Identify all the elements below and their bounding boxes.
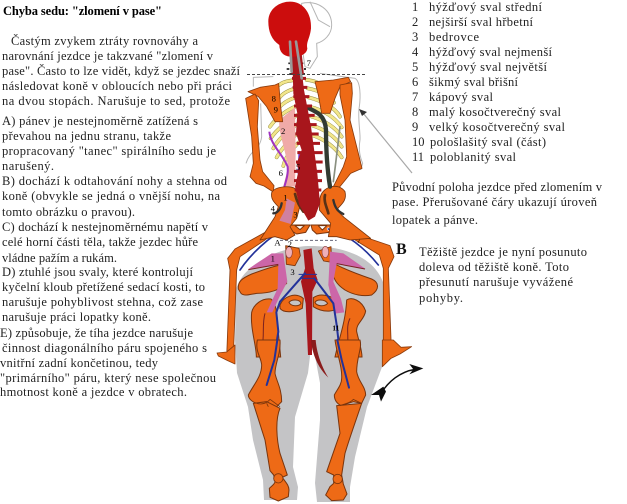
muscle number labels: 3	[290, 267, 295, 277]
text block: point E: hmotnost koně a jezdce v obratech.	[0, 385, 187, 399]
text block: point A: A) pánev je nestejnoměrně zatížená s	[2, 114, 198, 128]
text block: point C: celé horní části těla, takže jezdec hůře	[2, 235, 198, 249]
tail tip	[311, 340, 328, 378]
text block: introduction: následovat koně v obloucích nebo při práci	[2, 79, 233, 93]
legend: muscle list: 11	[412, 150, 424, 164]
femur heads	[251, 299, 366, 357]
text block: point B: tomto obrázku o pravou).	[2, 205, 135, 219]
leg blue muscles	[274, 273, 340, 357]
ghost skull outline	[300, 2, 332, 68]
caption: original position	[392, 180, 603, 227]
legs and hands detail	[217, 340, 423, 501]
muscle number labels	[271, 225, 362, 333]
head	[268, 2, 311, 57]
muscle number labels: 5	[296, 162, 300, 172]
legend: muscle list: malý kosočtverečný sval	[429, 105, 562, 119]
text block: point B	[2, 174, 228, 219]
label B: B	[396, 241, 407, 258]
text block: point C: vládne pažím a rukám.	[2, 251, 117, 265]
scapulae	[248, 77, 351, 122]
shoulder level dashed line	[247, 74, 367, 76]
text block: introduction	[2, 34, 241, 108]
knee and ankle details	[257, 399, 362, 484]
text block: point D: narušuje práci lopatky koně.	[2, 310, 151, 324]
legend: muscle list	[412, 0, 566, 164]
spine end and tail	[301, 248, 318, 355]
title: Chyba sedu: "zlomení v pase"	[3, 4, 162, 18]
muscle number labels: 3	[293, 209, 298, 219]
caption: centre of gravity: Těžiště jezdce je nyní posunuto	[419, 245, 587, 259]
text block: point D: kyčelní kloub přetížené sedací kosti, to	[2, 280, 205, 294]
legend: muscle list: 7	[412, 90, 418, 104]
hip joint ovals	[286, 246, 329, 258]
gluteus muscles	[248, 252, 366, 314]
caption: centre of gravity: pohyby.	[419, 291, 463, 305]
rib cage	[270, 80, 342, 166]
muscle number labels: 8	[272, 94, 276, 104]
muscle number labels: 2	[281, 126, 285, 136]
legend: muscle list: hýžďový sval největší	[429, 60, 548, 74]
legend: muscle list: kápový sval	[429, 90, 494, 104]
text block: point B: B) dochází k odtahování nohy a stehna od	[2, 174, 228, 188]
lower blue muscles	[267, 340, 349, 388]
label 7: 7	[307, 58, 312, 68]
legend: muscle list: 4	[412, 45, 419, 59]
legend: muscle list: 8	[412, 105, 418, 119]
muscle number labels	[271, 94, 300, 219]
spine cervical	[291, 43, 304, 75]
legend: muscle list: 6	[412, 75, 418, 89]
legend: muscle list: 10	[412, 135, 424, 149]
legend: muscle list: 3	[412, 30, 418, 44]
curved movement arrow	[371, 364, 423, 402]
ghost body outline	[246, 73, 363, 170]
muscle number labels: 10	[334, 225, 341, 234]
legend: muscle list: pološlašitý sval (část)	[430, 135, 546, 149]
text block: introduction: narovnání jezdce je takzvané "zlomení v	[2, 49, 214, 63]
muscle number labels: 1	[271, 254, 275, 264]
pink muscle on hip	[279, 198, 295, 224]
legend: muscle list: bedrovce	[429, 30, 479, 44]
muscle number labels: 1	[283, 193, 288, 203]
muscle number labels: 2	[288, 239, 292, 249]
text block: point A: propracovaný "tanec" spirálního sedu je	[2, 144, 216, 158]
text block: introduction: na dvou stopách. Narušuje to sed, protože	[2, 94, 230, 108]
text block: point A: narušený.	[2, 159, 54, 173]
legend: muscle list: hýžďový sval nejmenší	[429, 45, 553, 59]
text block: point C: C) dochází k nestejnoměrnému napětí v	[2, 220, 209, 234]
spine	[292, 70, 323, 221]
legend: muscle list: velký kosočtverečný sval	[429, 120, 566, 134]
head and neck	[268, 2, 312, 78]
muscle number labels: A	[274, 238, 281, 248]
muscle number labels: 4	[271, 203, 276, 213]
text block: point E: vnitřní zadní končetinou, tedy	[0, 356, 159, 370]
legend: muscle list: 5	[412, 60, 418, 74]
legend: muscle list: poloblanitý sval	[430, 150, 517, 164]
legend: muscle list: šikmý sval břišní	[429, 75, 519, 89]
muscle number labels: 7	[357, 235, 362, 245]
legend: muscle list: 2	[412, 15, 418, 29]
blue muscles	[240, 227, 378, 270]
femurs	[248, 340, 366, 407]
text block: point C	[2, 220, 209, 265]
dark muscle lines	[248, 264, 365, 350]
tibias and feet	[253, 402, 362, 501]
muscle number labels: 9	[274, 105, 278, 115]
legend: muscle list: nejširší sval hřbetní	[429, 15, 534, 29]
torso detail	[246, 70, 371, 240]
text block: point E: "primárního" páru, který nese společnou	[0, 371, 217, 385]
rider arms upper	[246, 83, 362, 192]
legend: muscle list: 1	[412, 0, 418, 14]
muscle number labels: 11	[332, 324, 340, 333]
muscle number labels: 6	[279, 168, 284, 178]
text block: point E	[0, 326, 217, 399]
text block: introduction: Častým zvykem ztráty rovnováhy a	[11, 34, 198, 48]
trapezius and dark muscles	[273, 107, 343, 214]
rider hands	[217, 340, 412, 367]
horse hindquarters gray body	[235, 246, 385, 502]
text block: point D	[2, 265, 205, 324]
rider arms around hips	[227, 225, 394, 357]
caption: original position: Původní poloha jezdce před zlomením v	[392, 180, 603, 194]
figure: rider and horse anatomy	[217, 2, 423, 502]
caption: centre of gravity: doleva od těžiště koně. Toto	[419, 260, 569, 274]
ischium bones	[286, 246, 332, 266]
legend: muscle list: 9	[412, 120, 418, 134]
hip bones	[260, 186, 371, 240]
caption: centre of gravity: přesunutí narušuje vyvážené	[419, 275, 573, 289]
text block: point D: narušuje pohyblivost stehna, což zase	[2, 295, 203, 309]
caption: original position: pase. Přerušované čáry ukazují úroveň	[392, 195, 598, 209]
text block: point D: D) ztuhlé jsou svaly, které kontrolují	[2, 265, 194, 279]
pelvis level dashed line	[280, 239, 337, 242]
text block: point E: E) způsobuje, že tíha jezdce narušuje	[0, 326, 193, 340]
upper pelvis rings	[289, 225, 332, 234]
text block: point A	[2, 114, 216, 173]
legend: muscle list: hýžďový sval střední	[429, 0, 543, 14]
oblique muscle purple	[269, 132, 288, 191]
pelvis lower rings	[280, 295, 340, 312]
text block: point E: činnost diagonálního páru spojeného s	[2, 341, 207, 355]
caption: centre of gravity	[419, 245, 587, 305]
pointer arrow to original position	[359, 109, 412, 173]
text block: introduction: pase". Často to lze vidět, když se jezdec snaží	[2, 64, 241, 78]
caption: original position: lopatek a pánve.	[392, 213, 478, 227]
neck vertebrae tips	[287, 63, 306, 74]
text block: point B: koně (obvykle se jedná o vnější nohu, na	[2, 189, 220, 203]
latissimus muscle pink	[279, 107, 296, 187]
hip region detail	[227, 225, 394, 357]
pelvis iliac wings	[238, 261, 378, 296]
text block: point A: převahou na jednu stranu, takže	[2, 129, 171, 143]
neck muscles	[290, 42, 302, 78]
